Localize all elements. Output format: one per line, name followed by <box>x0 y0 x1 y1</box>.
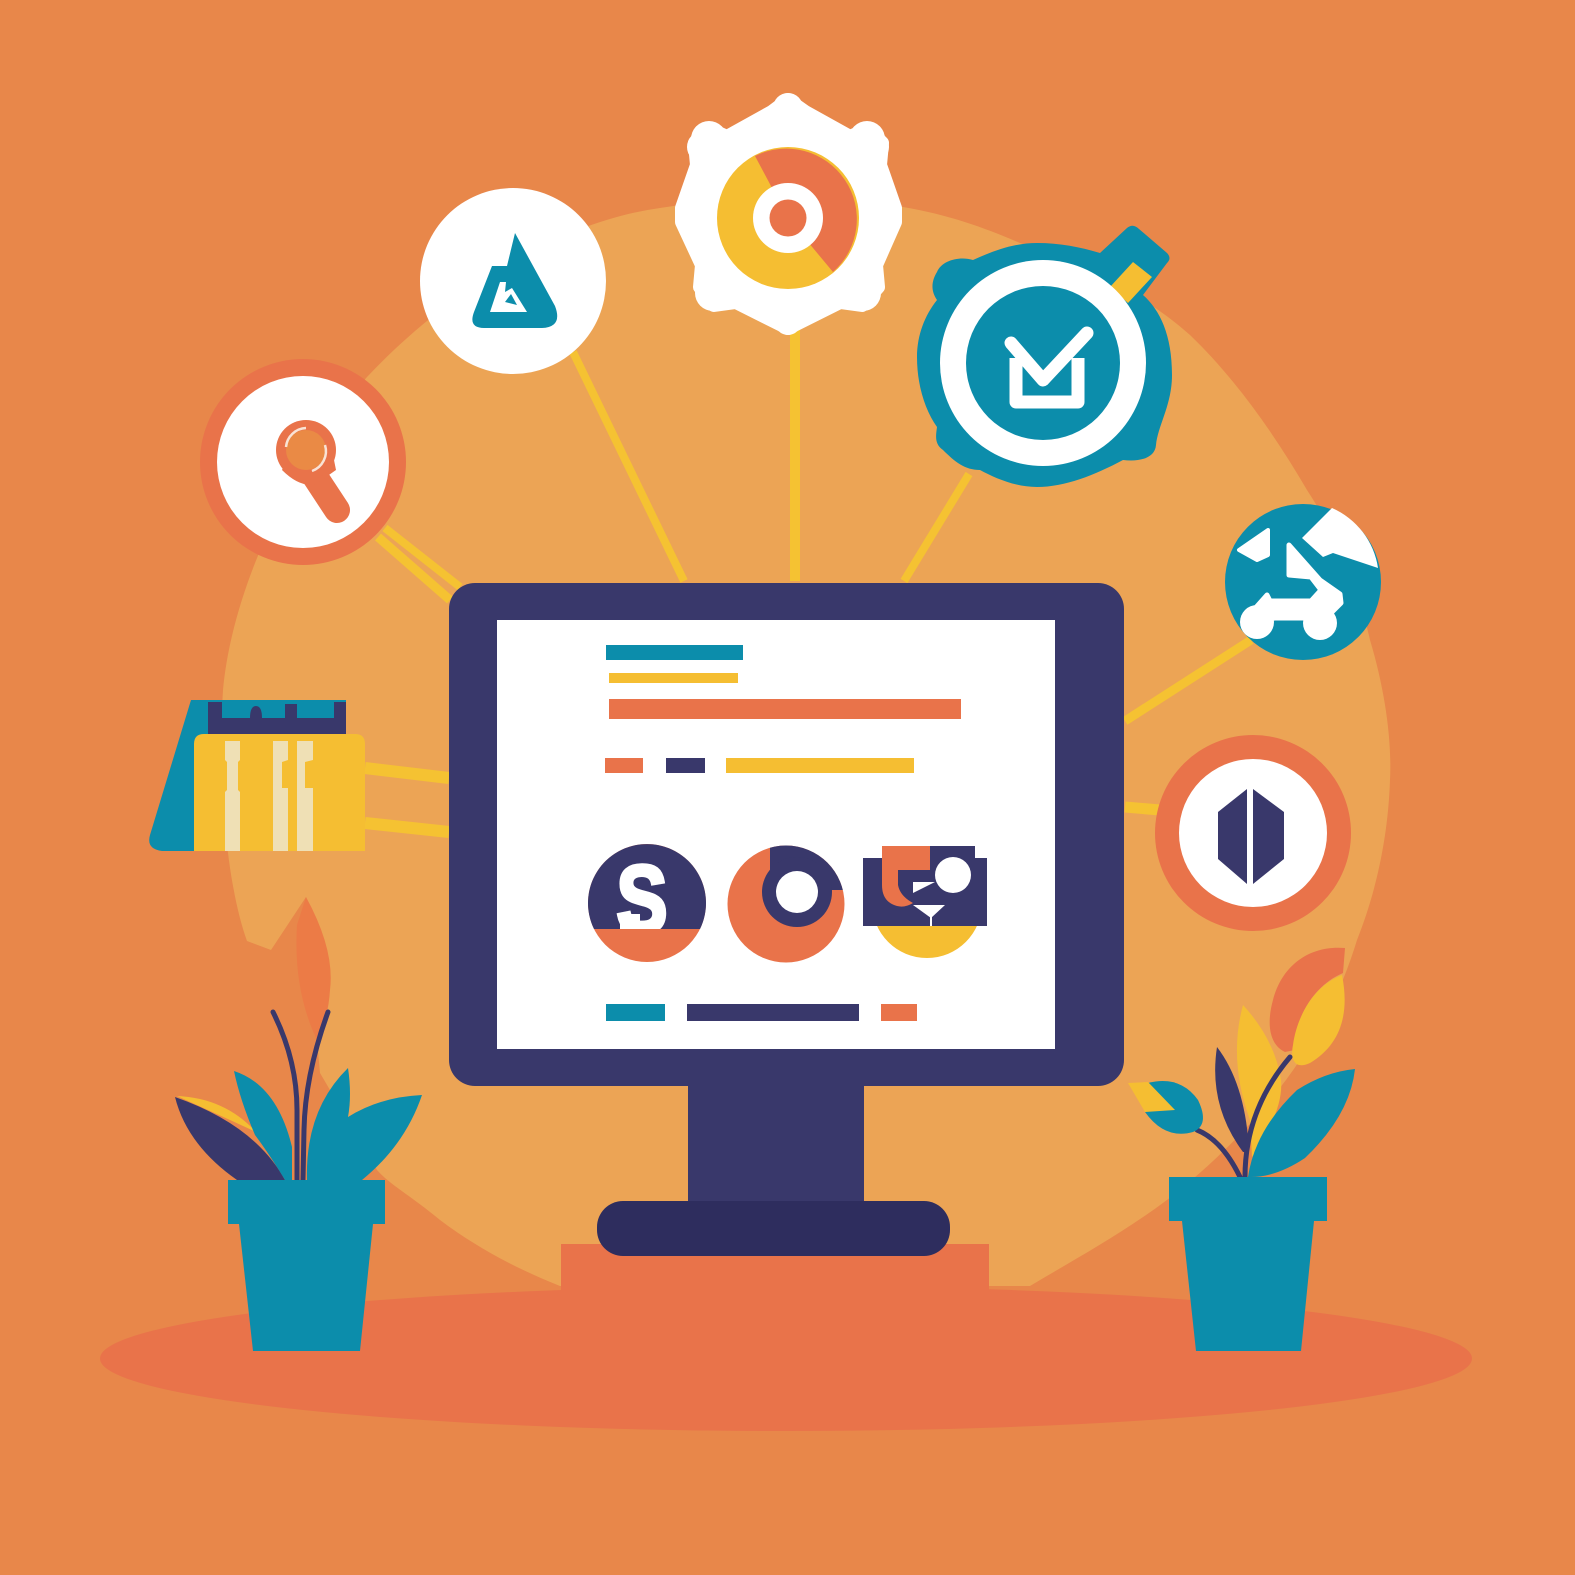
connector lines <box>365 330 1251 832</box>
platform <box>561 1244 989 1294</box>
monitor <box>449 583 1124 1256</box>
icon: hexagon badge <box>1155 735 1351 931</box>
left plant <box>175 897 422 1351</box>
left pot <box>228 1180 385 1351</box>
screen footer bars <box>606 1004 917 1021</box>
flame leaf <box>296 897 331 1040</box>
logo: camera tile <box>863 846 987 958</box>
logo: ring circle <box>728 840 850 962</box>
icon: teal stopwatch with check <box>917 226 1172 487</box>
monitor frame <box>449 583 1124 1086</box>
yellow sliver <box>177 1096 256 1132</box>
icon: calendar folder <box>149 700 365 851</box>
screen text bars <box>605 645 961 773</box>
monitor stand base <box>597 1201 950 1256</box>
icon: triangle badge <box>420 188 606 374</box>
right plant <box>1128 948 1355 1351</box>
yellow flower <box>1292 975 1345 1065</box>
icon: magnifier badge <box>200 359 406 565</box>
icon: gear with donut <box>675 93 901 335</box>
teal leaf <box>1248 1069 1355 1177</box>
ground ellipse <box>100 1286 1472 1431</box>
navy leaf <box>1215 1047 1249 1152</box>
stems <box>273 1012 328 1180</box>
logo: S circle <box>588 844 706 962</box>
logo: S circle: S <box>616 846 668 953</box>
teal double leaf <box>307 1068 422 1180</box>
bud <box>1145 1081 1203 1134</box>
monitor screen <box>497 620 1055 1049</box>
yellow leaf <box>1237 1005 1281 1157</box>
icon: teal car badge <box>1225 504 1381 660</box>
navy leaf <box>175 1097 285 1180</box>
background: light circle <box>221 198 1390 1286</box>
right pot <box>1169 1177 1327 1351</box>
monitor stand neck <box>688 1080 864 1208</box>
stems <box>1197 1057 1290 1177</box>
red petal <box>1270 948 1345 1052</box>
teal leaf <box>234 1071 292 1180</box>
